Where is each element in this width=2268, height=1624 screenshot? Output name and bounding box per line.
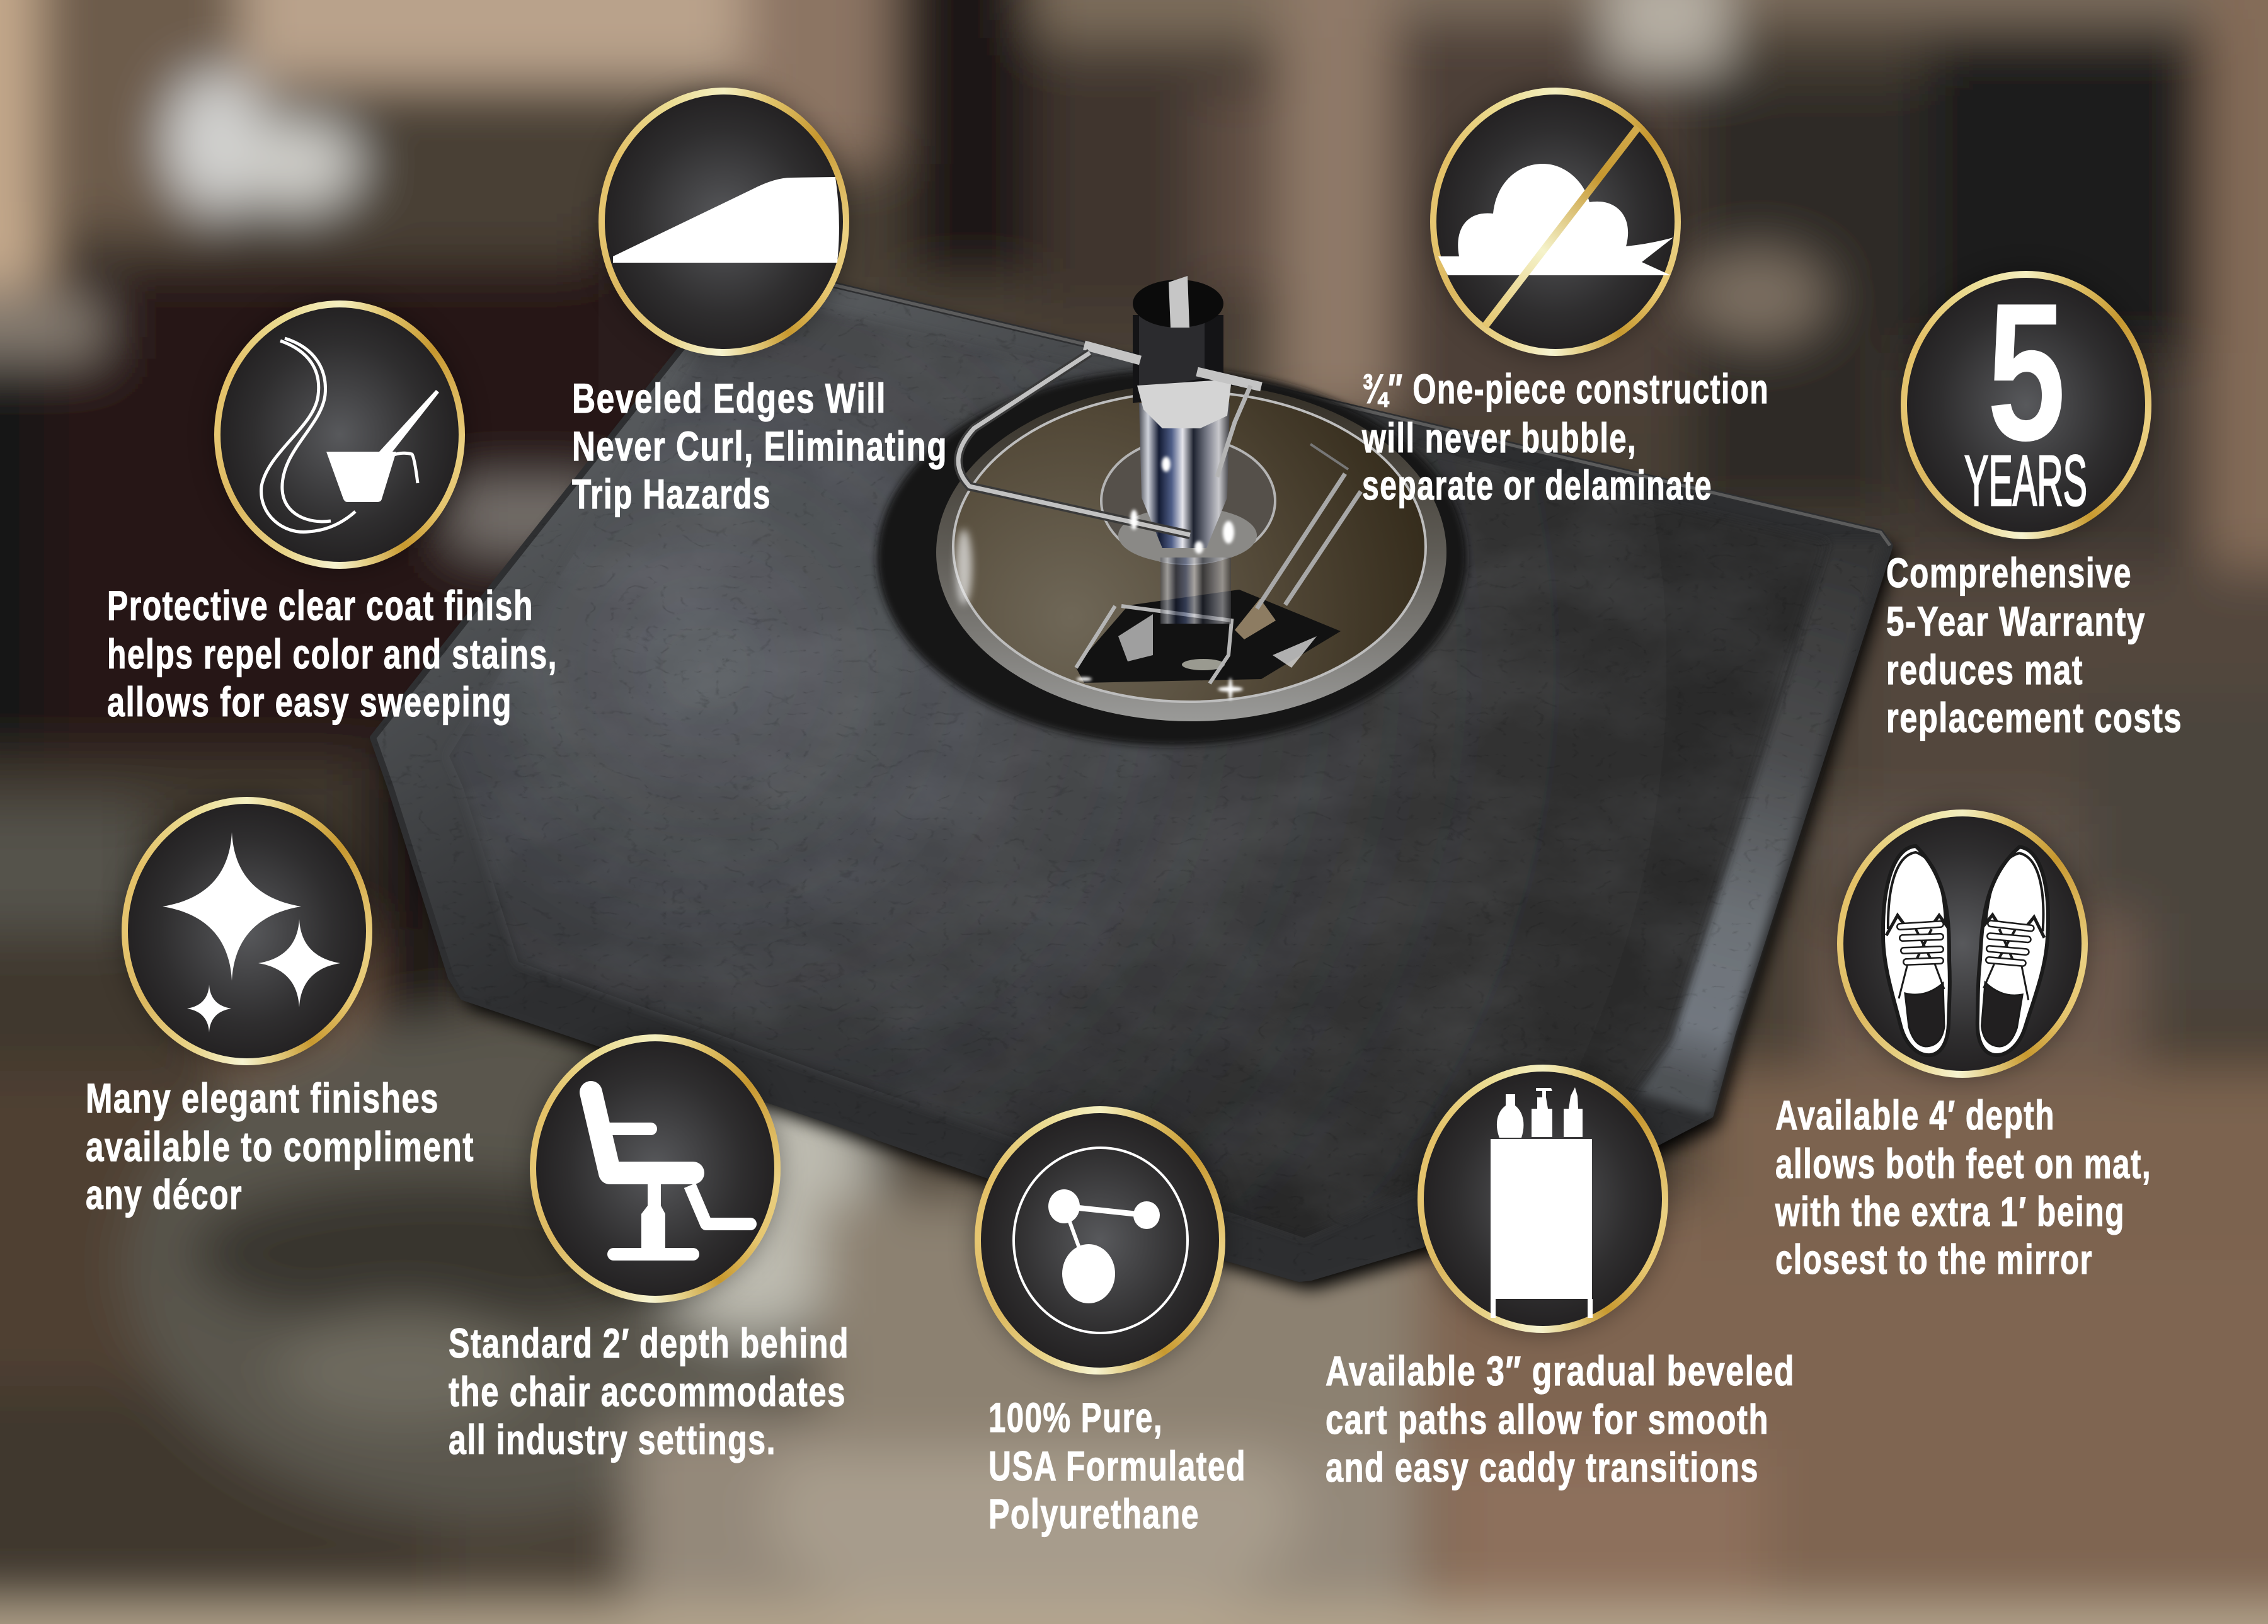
- chrome highlights: [1077, 457, 1243, 700]
- icon: salon chair: [530, 1034, 781, 1303]
- caption: polyurethane: [988, 1394, 1246, 1537]
- caption: polyurethane: 100% Pure,: [988, 1394, 1163, 1441]
- icon: hair and colour bowl: [260, 336, 439, 534]
- caption: clear coat: [107, 582, 558, 725]
- caption: 4 foot depth: allows both feet on mat,: [1775, 1140, 2151, 1187]
- caption: 4 foot depth: Available 4′ depth: [1775, 1092, 2055, 1138]
- mat: right bevel: [1638, 542, 1887, 1115]
- caption: one-piece construction: [1361, 365, 1769, 508]
- caption: clear coat: helps repel color and stains,: [107, 631, 558, 677]
- anti-fatigue mat: [373, 265, 1890, 1279]
- caption: beveled edges: [572, 375, 948, 517]
- mat: outer bevel: [373, 265, 1890, 1279]
- caption: 4 foot depth: closest to the mirror: [1775, 1236, 2093, 1283]
- reflection in dish: [1075, 590, 1341, 683]
- caption: finishes: available to compliment: [86, 1123, 474, 1170]
- chrome dish: [936, 384, 1446, 721]
- caption: clear coat: allows for easy sweeping: [107, 678, 512, 725]
- mat: top surface: [449, 290, 1827, 1238]
- caption: finishes: [86, 1075, 474, 1218]
- caption: 4 foot depth: [1775, 1092, 2151, 1283]
- badge: 5 year warranty: [1901, 271, 2151, 539]
- icon: 5 years: [1964, 271, 2087, 520]
- hub and pedestal: [1101, 438, 1275, 564]
- badge: cart paths: [1418, 1065, 1668, 1333]
- caption: finishes: any décor: [86, 1171, 243, 1218]
- chrome chair base: [936, 276, 1446, 721]
- badge: one-piece construction: [1430, 88, 1681, 356]
- caption: cart paths: [1326, 1347, 1795, 1490]
- caption: beveled edges: Trip Hazards: [572, 471, 771, 517]
- caption: 4 foot depth: with the extra 1′ being: [1775, 1188, 2125, 1235]
- pedestal cap: [1133, 280, 1223, 328]
- caption: warranty: [1886, 549, 2182, 741]
- caption: beveled edges: Beveled Edges Will: [572, 375, 886, 421]
- badge: 4 foot depth: [1837, 809, 2088, 1078]
- icon: caddy with bottles: [1491, 1087, 1593, 1318]
- icon: sparkles: [122, 797, 372, 1065]
- caption: cart paths: cart paths allow for smooth: [1326, 1396, 1769, 1443]
- caption: warranty: replacement costs: [1886, 694, 2182, 741]
- chair base recess: [877, 370, 1467, 745]
- mat shadow: [381, 275, 1898, 1289]
- badge: finishes: [122, 797, 372, 1065]
- caption: one-piece construction: will never bubble,: [1361, 415, 1637, 461]
- caption: one-piece construction: ¾″ One-piece construction: [1362, 365, 1769, 412]
- icon: beveled edge profile: [613, 177, 839, 263]
- footrest tubes: [1257, 474, 1361, 609]
- icon: molecule: [975, 1106, 1225, 1375]
- footrest bar: [1084, 345, 1261, 387]
- icon: pair of shoes: [1881, 844, 2050, 1057]
- caption: standard depth: [449, 1320, 849, 1463]
- caption: warranty: reduces mat: [1886, 646, 2083, 693]
- icon: crossed-out bubble: [1438, 125, 1673, 329]
- caption: cart paths: Available 3″ gradual beveled: [1326, 1347, 1795, 1394]
- caption: warranty: 5-Year Warranty: [1886, 598, 2146, 644]
- badge: standard depth: [530, 1034, 781, 1303]
- badge: polyurethane: [975, 1106, 1225, 1375]
- caption: polyurethane: Polyurethane: [988, 1490, 1200, 1537]
- caption: clear coat: Protective clear coat finish: [107, 582, 534, 629]
- caption: polyurethane: USA Formulated: [988, 1443, 1246, 1489]
- caption: one-piece construction: separate or delaminate: [1362, 462, 1712, 508]
- caption: standard depth: the chair accommodates: [449, 1368, 846, 1415]
- badge: bevel edge: [598, 88, 849, 356]
- caption: cart paths: and easy caddy transitions: [1326, 1444, 1759, 1490]
- badge: clear coat: [214, 300, 465, 569]
- caption: standard depth: Standard 2′ depth behind: [449, 1320, 849, 1366]
- caption: standard depth: all industry settings.: [449, 1416, 776, 1463]
- caption: beveled edges: Never Curl, Eliminating: [572, 423, 948, 469]
- caption: warranty: Comprehensive: [1886, 549, 2132, 596]
- caption: finishes: Many elegant finishes: [86, 1075, 439, 1121]
